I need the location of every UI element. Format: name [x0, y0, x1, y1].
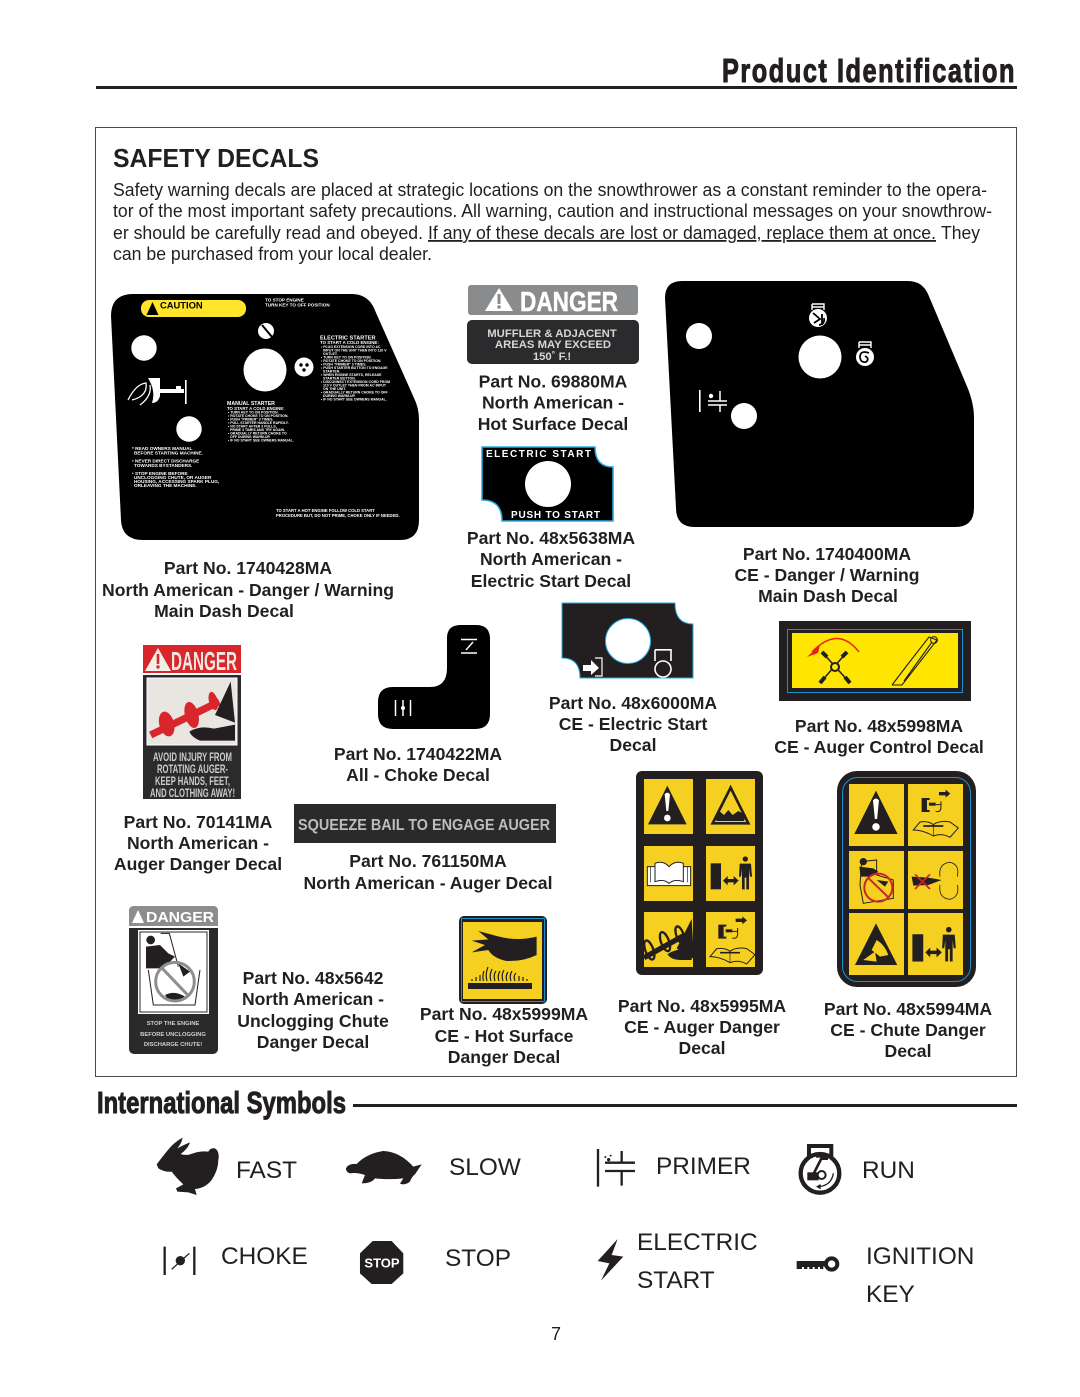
decal: auger control CE 48x5998MA [779, 621, 971, 701]
symbol: fast: FAST [236, 1157, 297, 1184]
decal: auger danger 70141MA: DANGER [171, 646, 237, 676]
decal: main dash North American: • PLUG EXTENSION CORD INTO AC [321, 345, 381, 349]
decal: hot surface danger 69880MA [467, 285, 639, 364]
intro paragraph: They [941, 223, 980, 243]
decal: main dash North American: ELECTRIC STARTER [320, 336, 376, 342]
decal: unclogging chute danger 48x5642: DISCHARGE CHUTE! [144, 1042, 202, 1048]
page header: Product Identification [96, 52, 1017, 89]
decal: main dash CE [665, 281, 974, 527]
decal: main dash North American: TO START A HOT ENGINE FOLLOW COLD START [276, 508, 375, 513]
decal: main dash North American: • PUSH "PRIMER" 3 TIMES. [228, 418, 273, 422]
symbol: ignition key: KEY [866, 1281, 915, 1308]
caption: 48x6000MA: Decal [610, 735, 656, 755]
decal: main dash North American: • TURN KEY TO ON POSITION. [321, 356, 372, 360]
caption: 48x6000MA: Part No. 48x6000MA [549, 693, 717, 713]
symbol: ignition key [797, 1243, 974, 1308]
decal: auger danger 70141MA [143, 645, 241, 800]
decal: electric start CE 48x6000MA [562, 603, 693, 678]
decal: choke 1740422MA [378, 625, 490, 729]
symbol: run: RUN [862, 1157, 915, 1184]
decal: main dash North American: * READ OWNERS MANUAL [132, 446, 193, 451]
caption: 48x5642: North American - [242, 989, 384, 1009]
caption: 1740428MA: Part No. 1740428MA [164, 558, 332, 578]
intro paragraph: er should be carefully read and obeyed. [113, 223, 423, 243]
decal: hot surface danger 69880MA: DANGER [520, 286, 618, 317]
decal: main dash North American: TO START A COLD ENGINE: [320, 340, 379, 345]
caption: 48x5642: Danger Decal [257, 1032, 369, 1052]
symbol: slow: SLOW [449, 1154, 521, 1181]
decal: main dash North American: • IF NO START SEE OWNERS MANUAL. [321, 398, 387, 402]
caption: 48x5638MA: Part No. 48x5638MA [467, 528, 635, 548]
heading: international symbols: International Symbols [97, 1085, 346, 1120]
caption: 48x5642: Part No. 48x5642 [243, 968, 384, 988]
decal: main dash North American: • GRADUALLY RETURN CHOKE TO [228, 432, 287, 436]
symbol: fast [157, 1138, 297, 1195]
decal: main dash North American: BEFORE STARTING MACHINE. [134, 450, 203, 456]
decal: main dash North American: • PULL STARTER HANDLE RAPIDLY. [228, 421, 289, 425]
symbol: run [801, 1146, 915, 1193]
caption: 48x5995MA: CE - Auger Danger [624, 1017, 780, 1037]
caption: 1740422MA: Part No. 1740422MA [334, 744, 502, 764]
caption: 70141MA: Part No. 70141MA [124, 812, 273, 832]
symbol: stop [360, 1241, 511, 1284]
caption: 69880MA: North American - [482, 392, 624, 412]
intro paragraph [113, 180, 992, 264]
decal: unclogging chute danger 48x5642: STOP THE ENGINE [147, 1021, 199, 1027]
page number: 7 [551, 1324, 561, 1344]
decal: unclogging chute danger 48x5642 [129, 906, 218, 1054]
decal: main dash North American: • DISCONNECT EXTENSION CORD FROM [321, 380, 390, 384]
decal: main dash North American: ON THE UNIT. [323, 387, 346, 391]
decal: auger danger CE 48x5995MA [636, 771, 763, 975]
caption: 48x5638MA: Electric Start Decal [471, 571, 631, 591]
caption: 48x5995MA: Decal [679, 1038, 725, 1058]
decal: hot surface danger 69880MA: MUFFLER & ADJACENT [487, 328, 617, 340]
caption: 1740428MA: Main Dash Decal [154, 601, 294, 621]
decal: hot surface danger 69880MA: 150˚ F.! [533, 351, 571, 363]
decal: main dash North American: DURING WARM-UP. [323, 394, 356, 398]
decal: main dash North American: • GRADUALLY RETURN CHOKE TO OFF [321, 390, 389, 394]
decal: main dash North American: • ROTATE CHOKE TO ON POSITION. [321, 359, 381, 363]
decal: main dash North American: MANUAL STARTER [227, 401, 275, 407]
decal: main dash North American: TO STOP ENGINE [265, 298, 304, 302]
heading: safety decals: SAFETY DECALS [113, 145, 319, 173]
decal: main dash North American: TURN KEY TO OFF POSITION [265, 302, 330, 308]
decal: main dash North American: PRIME 3 TIMES AND TRY AGAIN. [230, 428, 285, 432]
caption: 48x5999MA: Part No. 48x5999MA [420, 1004, 588, 1024]
caption: 48x5999MA: Danger Decal [448, 1047, 560, 1067]
decal: electric start 48x5638MA [482, 447, 613, 521]
intro paragraph: Safety warning decals are placed at strategic locations on the snowthrower as a constant reminder to the opera- [113, 180, 987, 200]
symbol: choke: CHOKE [221, 1243, 308, 1270]
intro paragraph: can be purchased from your local dealer. [113, 244, 432, 264]
decal: main dash North American: • PUSH STARTER BUTTON TO ENGAGE [321, 366, 388, 370]
decal: main dash North American: TO START A COLD ENGINE: [227, 406, 285, 411]
caption: 48x6000MA: CE - Electric Start [559, 714, 707, 734]
decal: unclogging chute danger 48x5642: DANGER [146, 909, 214, 926]
decal: main dash North American: OUTLET. [323, 352, 338, 356]
caption: 761150MA: Part No. 761150MA [349, 851, 507, 871]
symbol: electric start [598, 1229, 758, 1294]
decal: auger danger 70141MA: KEEP HANDS, FEET, [155, 776, 230, 788]
decal: auger 761150MA [294, 804, 556, 843]
decal: main dash North American: STARTER BUTTON. [323, 376, 356, 380]
caption: 48x5994MA: Part No. 48x5994MA [824, 999, 992, 1019]
decal: hot surface CE 48x5999MA [459, 916, 547, 1004]
decal: auger danger 70141MA: ROTATING AUGER- [157, 764, 228, 776]
symbol: electric start: START [637, 1267, 715, 1294]
caption: 1740400MA: Main Dash Decal [758, 586, 898, 606]
decal: main dash North American: ORLEAVING THE MACHINE. [134, 483, 197, 488]
symbol: slow [346, 1151, 521, 1184]
decal: main dash North American: INPUT ON THE UNIT THEN INTO 110 V [323, 348, 387, 352]
decal: main dash North American: 110 V OUTLET THEN FROM AC INPUT [323, 384, 387, 388]
decal: main dash North American: STARTER. [323, 370, 340, 374]
caption: 48x5994MA: Decal [885, 1041, 931, 1061]
symbol: electric start: ELECTRIC [637, 1229, 758, 1256]
decal: main dash North American: • PUSH "PRIMER" 3 TIMES. [321, 362, 366, 366]
decal: main dash North American: • IF NO START SEE OWNERS MANUAL. [228, 438, 294, 442]
heading: international symbols [97, 1085, 1017, 1120]
decal: auger danger 70141MA: AVOID INJURY FROM [153, 752, 232, 764]
decal: main dash North American: OFF DURING WARM-UP. [230, 435, 271, 439]
symbol: stop: STOP [445, 1245, 511, 1272]
decal: main dash North American: PROCEDURE BUT, DO NOT PRIME, CHOKE ONLY IF NEEDED. [276, 513, 400, 518]
caption: 48x5998MA: Part No. 48x5998MA [795, 716, 963, 736]
caption: 48x5998MA: CE - Auger Control Decal [774, 737, 984, 757]
decal: main dash North American [111, 294, 419, 540]
decal: main dash North American: CAUTION [160, 300, 203, 310]
decal: main dash North American: • ROTATE CHOKE TO ON POSITION. [228, 414, 288, 418]
decal: main dash North American: HOUSING, ACCESSING SPARK PLUG, [134, 479, 219, 484]
intro paragraph: tor of the most important safety precautions. All warning, caution and instructional messages on your snowthrow- [113, 201, 992, 221]
decal: main dash North American: • WHEN ENGINE STARTS, RELEASE [321, 373, 382, 377]
caption: 1740400MA: CE - Danger / Warning [734, 565, 920, 585]
decal: unclogging chute danger 48x5642: BEFORE UNCLOGGING [140, 1032, 206, 1038]
caption: 1740428MA: North American - Danger / Warning [102, 580, 394, 600]
decal: auger danger 70141MA: AND CLOTHING AWAY! [150, 788, 235, 800]
symbol: primer [598, 1149, 751, 1187]
panel: safety decals [96, 128, 1016, 1076]
decal: main dash North American: • STOP ENGINE BEFORE [132, 471, 188, 476]
caption: 70141MA: Auger Danger Decal [114, 854, 282, 874]
intro paragraph: If any of these decals are lost or damaged, replace them at once. [428, 223, 936, 243]
symbol: primer: PRIMER [656, 1153, 751, 1180]
caption: 761150MA: North American - Auger Decal [304, 873, 552, 893]
caption: 48x5638MA: North American - [480, 549, 622, 569]
caption: 1740400MA: Part No. 1740400MA [743, 544, 911, 564]
decal: hot surface danger 69880MA: AREAS MAY EXCEED [495, 339, 611, 351]
symbol: choke [165, 1243, 308, 1275]
caption: 48x5642: Unclogging Chute [237, 1011, 389, 1031]
decal: main dash North American: • NEVER DIRECT DISCHARGE [132, 458, 199, 464]
caption: 1740422MA: All - Choke Decal [346, 765, 490, 785]
decal: main dash North American: TOWARDS BYSTANDERS. [134, 463, 192, 468]
decal: main dash North American: UNCLOGGING CHUTE, OR AUGER [134, 475, 212, 480]
decal: main dash North American: • TURN KEY TO ON POSITION. [228, 410, 279, 414]
decal: electric start 48x5638MA: PUSH TO START [511, 510, 600, 521]
decal: chute danger CE 48x5994MA [837, 771, 976, 987]
symbol: stop: STOP [364, 1256, 400, 1270]
decal: auger 761150MA: SQUEEZE BAIL TO ENGAGE AUGER [298, 817, 550, 834]
decal: main dash North American: • NO START AFTER 3 PULLS, [228, 424, 277, 428]
caption: 70141MA: North American - [127, 833, 269, 853]
symbol: ignition key: IGNITION [866, 1243, 974, 1270]
caption: 48x5994MA: CE - Chute Danger [830, 1020, 986, 1040]
caption: 69880MA: Hot Surface Decal [478, 414, 628, 434]
caption: 48x5995MA: Part No. 48x5995MA [618, 996, 786, 1016]
decal: electric start 48x5638MA: ELECTRIC START [486, 449, 591, 460]
caption: 69880MA: Part No. 69880MA [479, 372, 628, 392]
caption: 48x5999MA: CE - Hot Surface [435, 1026, 574, 1046]
